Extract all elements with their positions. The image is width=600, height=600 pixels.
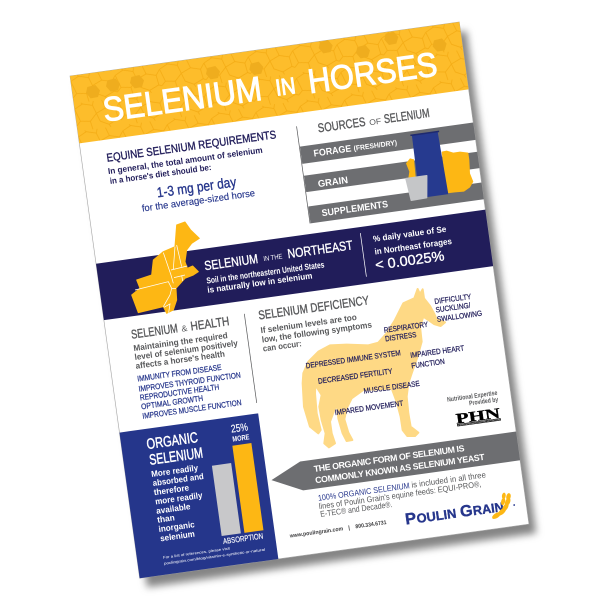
panel: sources of selenium: [309, 105, 449, 219]
symptom labels: MUSCLE DISEASE: [363, 379, 420, 396]
icon: PHN logo: PERFORMANCE HORSE NUTRITION: [458, 418, 501, 427]
symptom labels: [299, 291, 494, 420]
panel: selenium and health: HEALTH: [190, 314, 230, 333]
sources divider: [297, 126, 310, 223]
arrow text: THE ORGANIC FORM OF SELENIUM IS: [313, 443, 465, 474]
credit: PHN nutritional expertise: Provided by: [469, 396, 499, 407]
logo: Poulin Grain: RAIN: [472, 499, 505, 518]
mosaic darker cells: [86, 32, 447, 98]
bar chart: absorption: [207, 421, 265, 546]
panel: selenium deficiency: low, the following symptoms: [261, 319, 373, 345]
panel: organic selenium text and chart: therefore: [153, 482, 190, 497]
panel: organic selenium text and chart: selenium: [160, 529, 196, 543]
panel: selenium and health: [130, 313, 247, 421]
panel: organic selenium text and chart: more readily: [155, 490, 203, 506]
panel: organic selenium text and chart: More readily: [151, 463, 199, 479]
panel: selenium in the northeast: NORTHEAST: [286, 237, 354, 261]
product text block: 100% ORGANIC SELENIUM: [317, 480, 410, 503]
product text block: [317, 469, 489, 519]
logo: Poulin Grain: P: [404, 510, 418, 529]
panel: organic selenium text and chart: available: [156, 501, 191, 516]
panel: organic selenium text and chart: inorganic: [158, 519, 195, 534]
panel: equine requirements: [105, 129, 285, 219]
sources bars: [300, 123, 484, 223]
title: IN: [274, 72, 297, 101]
symptom labels: SUCKLING/: [435, 301, 472, 314]
title: [100, 46, 440, 130]
symptom labels: DIFFICULTY: [434, 292, 472, 306]
footnote: [163, 542, 265, 566]
panel: selenium in the northeast: is naturally low in selenium: [207, 270, 313, 295]
symptom labels: DISTRESS: [385, 330, 417, 343]
icon: supplements cup: [406, 176, 430, 201]
panel: selenium and health: IMMUNITY FROM DISEASE: [137, 363, 222, 383]
panel: selenium deficiency: If selenium levels are too: [260, 312, 357, 335]
icon: horse silhouette: [303, 289, 445, 447]
panel: sources of selenium: GRAIN: [317, 175, 349, 190]
health divider: [244, 314, 257, 403]
symptom labels: IMPAIRED HEART: [410, 343, 465, 360]
panel: equine requirements: for the average-sized horse: [141, 188, 256, 215]
product text block: E-TEC® and Decade®.: [319, 499, 393, 519]
panel: selenium and health: REPRODUCTIVE HEALTH: [139, 382, 220, 402]
footnote: poulingrain.com/blog/vitamin-e-synthetic-or-natural: [164, 548, 265, 566]
panel: selenium and health: IMPROVES MUSCLE FUNCTION: [142, 398, 242, 421]
arrow text: COMMONLY KNOWN AS SELENIUM YEAST: [315, 452, 486, 485]
panel: selenium and health: IMPROVES THYROID FUNCTION: [138, 370, 242, 394]
logo dot: [513, 504, 515, 506]
panel: selenium in the northeast: < 0.0025%: [374, 247, 445, 273]
arrow banner: [269, 432, 520, 495]
panel: selenium and health: Maintaining the required: [133, 330, 228, 353]
bar chart: absorption: ABSORPTION: [222, 532, 264, 546]
icon: grain pile: [406, 151, 473, 193]
panel: selenium in the northeast: Soil in the northeastern United States: [206, 259, 325, 286]
panel: organic selenium text and chart: SELENIUM: [148, 446, 204, 469]
panel: organic selenium text and chart: than: [157, 512, 175, 525]
organic selenium panel: [119, 413, 278, 578]
panel: equine requirements: EQUINE SELENIUM REQUIREMENTS: [106, 129, 277, 165]
contact line: |: [348, 525, 351, 532]
icon: forage can: [410, 131, 448, 198]
logo: Poulin Grain: G: [459, 502, 474, 521]
credit: PHN nutritional expertise: [447, 390, 502, 428]
footnote: For a list of references, please visit: [163, 547, 230, 560]
panel: selenium in the northeast: [202, 221, 455, 299]
icon: PHN logo: [455, 406, 502, 428]
panel: selenium and health: level of selenium positively: [134, 338, 239, 362]
navy northeast band: [96, 210, 493, 320]
panel: selenium deficiency: can occur:: [262, 338, 302, 354]
product text block: lines of Poulin Grain's equine feeds: EQUI-PRO®,: [318, 479, 482, 511]
contact line: www.poulingrain.com: [289, 526, 344, 540]
panel: selenium and health: SELENIUM: [130, 321, 179, 342]
bar chart: absorption: 25%: [230, 421, 249, 436]
infographic sheet: [70, 22, 529, 578]
panel: selenium deficiency: [257, 278, 494, 426]
panel: equine requirements: In general, the total amount of selenium: [107, 145, 263, 176]
logo: Poulin Grain: [403, 491, 517, 532]
bar chart: absorption: MORE: [232, 432, 250, 444]
icon: wheat: [488, 491, 515, 521]
panel: selenium in the northeast: % daily value of Se: [372, 224, 447, 244]
panel: selenium in the northeast: IN THE: [263, 254, 283, 263]
panel: sources of selenium: OF: [369, 117, 382, 127]
title: SELENIUM: [100, 70, 264, 130]
panel: organic selenium text and chart: absorbed and: [152, 471, 204, 488]
icon: northeast map: [132, 222, 199, 313]
panel: sources of selenium: FORAGE: [313, 143, 353, 160]
contact line: 800.334.6731: [355, 520, 387, 530]
panel: organic selenium text and chart: ORGANIC: [146, 430, 199, 453]
panel: selenium deficiency: SELENIUM DEFICIENCY: [257, 293, 370, 323]
title banner: [70, 22, 469, 143]
all text and small graphics: [97, 43, 517, 566]
panel: sources of selenium: SELENIUM: [383, 106, 430, 126]
panel: sources of selenium: SUPPLEMENTS: [321, 199, 389, 219]
credit: PHN nutritional expertise: Nutritional Expertise: [447, 390, 498, 404]
panel: sources of selenium: (FRESH/DRY): [353, 138, 398, 153]
panel: selenium and health: &: [181, 323, 188, 334]
contact line: [289, 520, 387, 540]
symptom labels: SWALLOWING: [436, 309, 483, 324]
symptom labels: DECREASED FERTILITY: [317, 367, 393, 386]
panel: equine requirements: 1-3 mg per day: [156, 174, 237, 200]
symptom labels: RESPIRATORY: [383, 320, 429, 335]
product text block: is included in all three: [411, 469, 487, 490]
logo: Poulin Grain: OULIN: [416, 506, 457, 526]
icon: PHN logo: PHN: [455, 406, 502, 428]
panel: organic selenium text and chart: [145, 421, 266, 566]
page drop shadow: [77, 31, 536, 587]
symptom labels: FUNCTION: [411, 357, 445, 370]
symptom labels: IMPARED MOVEMENT: [334, 399, 404, 417]
panel: selenium in the northeast: in Northeast forages: [374, 236, 453, 257]
panel: sources of selenium: SOURCES: [317, 115, 366, 135]
panel: selenium and health: OPTIMAL GROWTH: [141, 394, 204, 411]
panel: selenium in the northeast: SELENIUM: [203, 251, 259, 273]
title: HORSES: [306, 46, 440, 101]
symptom labels: DEPRESSED IMMUNE SYSTEM: [305, 348, 401, 370]
panel: selenium and health: affects a horse's health: [135, 349, 225, 371]
panel: equine requirements: in a horse's diet should be:: [109, 162, 212, 186]
